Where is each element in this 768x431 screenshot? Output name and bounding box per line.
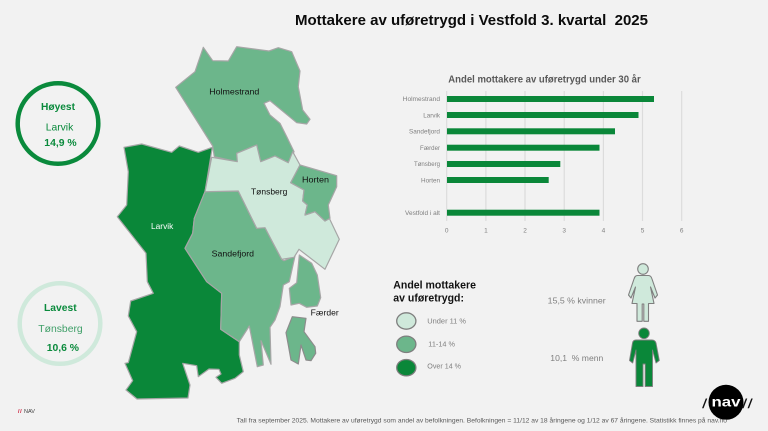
map labels [151, 86, 339, 318]
legend title: av uføretrygd: [393, 293, 464, 305]
map labels: Sandefjord [212, 249, 254, 259]
region: Sandefjord [185, 191, 295, 367]
legend: Over 14 % [427, 363, 461, 370]
callout: highest: Larvik [46, 122, 74, 134]
category labels: Færder [420, 145, 441, 152]
logo: NAV [702, 385, 753, 420]
axis ticks: 6 [680, 228, 684, 234]
region: Tønsberg [205, 145, 339, 269]
region: Holmestrand [176, 47, 310, 163]
axis ticks: 2 [523, 228, 527, 234]
logo: NAV: nav [712, 394, 741, 410]
source tag [18, 409, 35, 415]
source tag: NAV [24, 409, 35, 415]
bars [447, 96, 654, 216]
category labels: Vestfold i alt [405, 210, 440, 217]
category labels: Larvik [423, 112, 441, 119]
axis ticks [445, 228, 684, 234]
region: Horten [291, 165, 337, 221]
stat: men: 10,1 % menn [550, 353, 604, 363]
axis ticks: 0 [445, 228, 449, 234]
logo: NAV: / [702, 396, 708, 411]
category labels [403, 96, 441, 217]
legend: 11-14 % [428, 342, 455, 349]
map labels: Tønsberg [251, 186, 288, 196]
callout: lowest: Lavest [44, 302, 77, 314]
stat: women: 15,5 % kvinner [548, 295, 606, 305]
chart title: Andel mottakere av uføretrygd under 30 år [448, 73, 641, 85]
icon: woman [628, 264, 658, 321]
category labels: Horten [421, 177, 440, 184]
axis ticks: 4 [602, 228, 606, 234]
callout: highest: 14,9 % [44, 137, 77, 149]
map labels: Larvik [151, 221, 174, 231]
axis ticks: 5 [641, 228, 645, 234]
logo: NAV: / [747, 396, 753, 411]
category labels: Holmestrand [403, 96, 440, 103]
axis ticks: 1 [484, 228, 488, 234]
region: Larvik [117, 144, 243, 399]
category labels: Tønsberg [414, 161, 440, 168]
callout: lowest: 10,6 % [47, 342, 80, 354]
map labels: Færder [311, 308, 339, 318]
callout: highest [18, 83, 98, 164]
axis ticks: 3 [562, 228, 566, 234]
logo: NAV: / [742, 396, 748, 411]
region: Færder [286, 255, 321, 364]
legend: Under 11 % [427, 318, 466, 325]
title: Mottakere av uføretrygd i Vestfold 3. kvartal 2025 [295, 12, 648, 29]
callout: highest: Høyest [41, 101, 75, 113]
callout: lowest: Tønsberg [38, 323, 83, 335]
legend [393, 279, 476, 376]
footer note: Tall fra september 2025. Mottakere av uføretrygd som andel av befolkningen. Befolkningen = 11/12 av 18 åringene og 1/12 av 67 åringene. Statistikk finnes på nav.no [237, 417, 727, 425]
callout: lowest [20, 283, 100, 364]
source tag: // [18, 409, 22, 415]
bar chart: share under 30 [403, 73, 684, 234]
legend title: Andel mottakere [393, 279, 476, 291]
icon: man [630, 328, 659, 386]
map labels: Holmestrand [209, 86, 260, 96]
map of Vestfold municipalities [117, 47, 339, 399]
map labels: Horten [302, 175, 329, 185]
category labels: Sandefjord [409, 129, 440, 136]
